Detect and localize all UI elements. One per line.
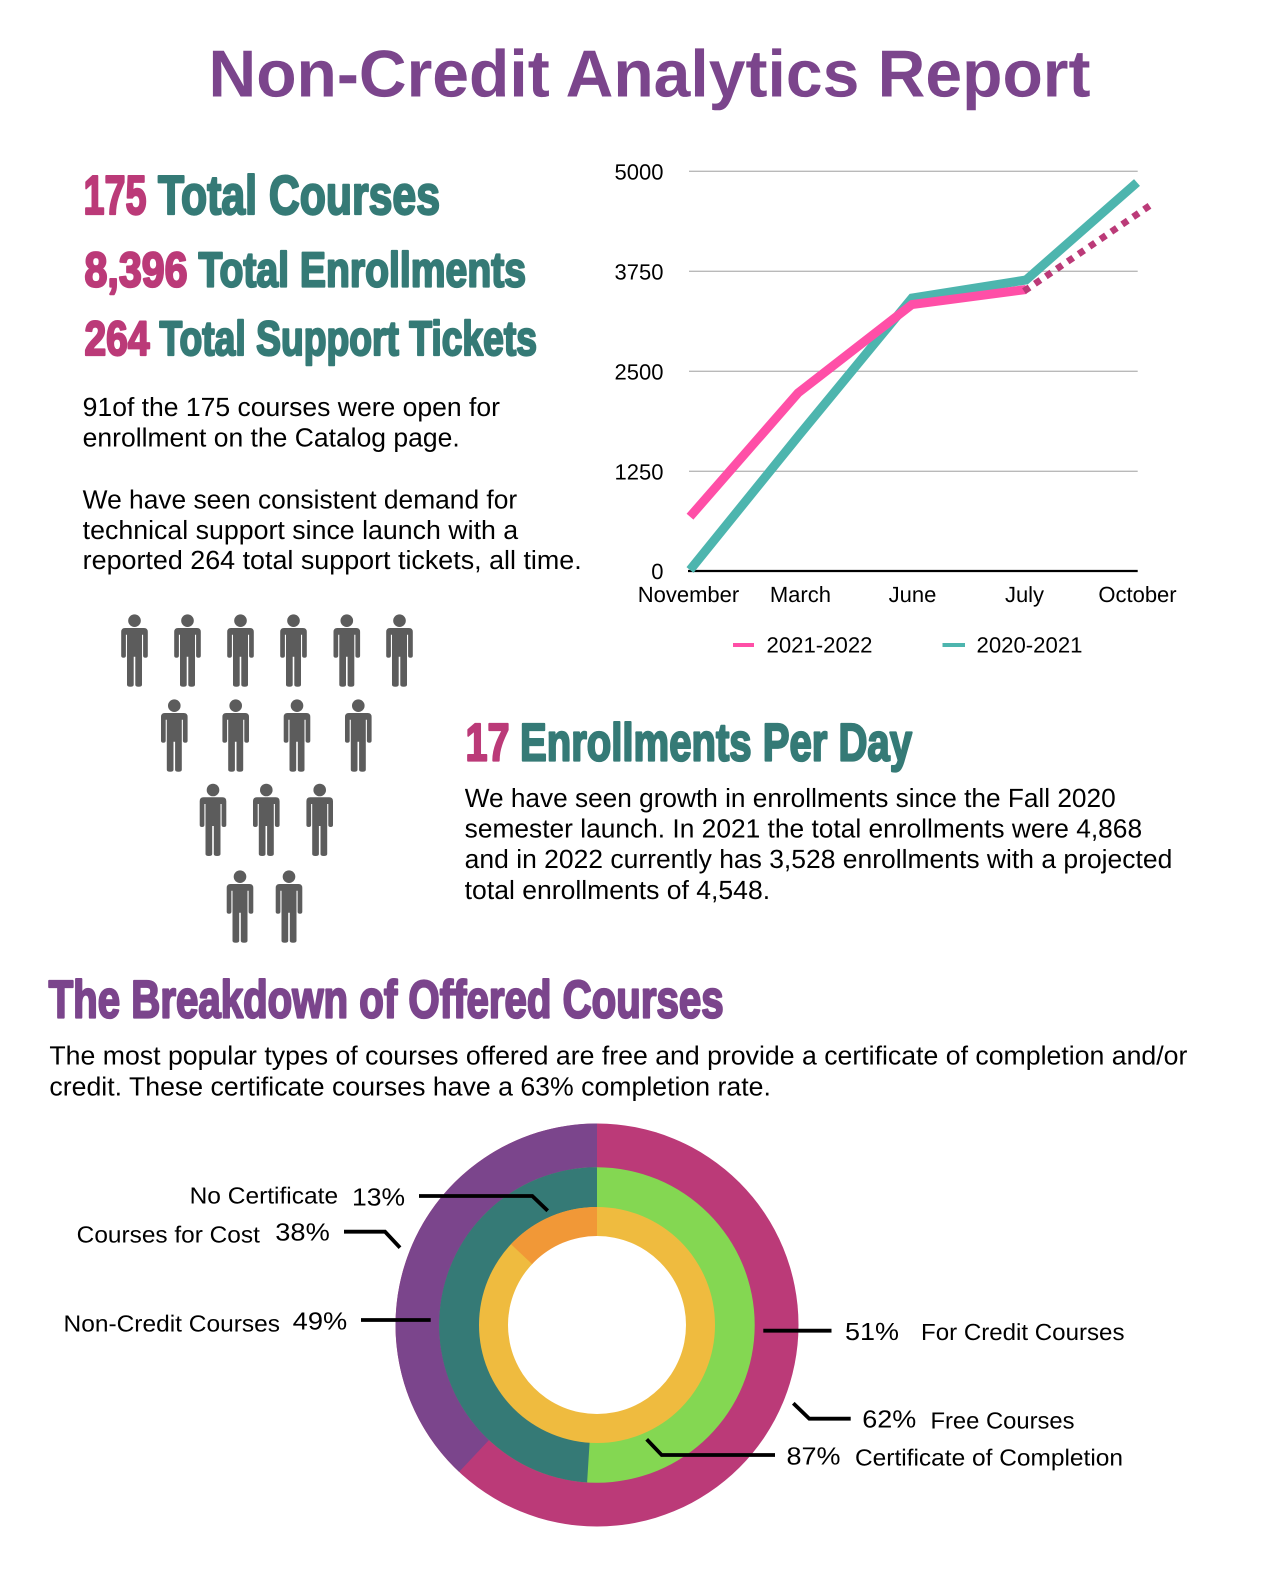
text block: catalog and support summary: reported 264 total support tickets, all time. bbox=[83, 545, 582, 575]
y axis labels bbox=[615, 159, 664, 584]
stat: total enrollments bbox=[84, 243, 526, 297]
stat: total support tickets: Total Support Tickets bbox=[160, 312, 537, 366]
y axis labels: 3750 bbox=[615, 259, 664, 284]
line chart: enrollments by month bbox=[615, 159, 1177, 658]
x axis labels: October bbox=[1098, 582, 1177, 607]
stat: total courses bbox=[84, 164, 440, 226]
text block: catalog and support summary: 91of the 175 courses were open for bbox=[83, 392, 500, 422]
text block: enrollment growth: semester launch. In 2021 the total enrollments were 4,868 bbox=[465, 814, 1142, 844]
y axis labels: 2500 bbox=[615, 359, 664, 384]
inner ring: certificate share bbox=[479, 1207, 715, 1443]
heading: enrollments per day: Enrollments Per Day bbox=[520, 714, 912, 772]
series: 2020-2021 bbox=[690, 182, 1137, 570]
middle ring: free vs non-credit share bbox=[439, 1167, 755, 1483]
stat: total support tickets: 264 bbox=[84, 312, 150, 366]
callout: courses for cost: Courses for Cost bbox=[77, 1222, 260, 1248]
legend bbox=[733, 632, 1082, 658]
y axis labels: 0 bbox=[651, 559, 664, 584]
stat: total courses: Total Courses bbox=[158, 164, 440, 226]
callout: certificate of completion bbox=[647, 1439, 1123, 1470]
x axis labels bbox=[638, 582, 1177, 607]
text block: enrollment growth bbox=[465, 783, 1172, 905]
callout: free courses bbox=[793, 1403, 1074, 1433]
callout: no certificate: No Certificate bbox=[190, 1182, 338, 1208]
callout: for credit courses: For Credit Courses bbox=[921, 1319, 1124, 1345]
x axis labels: July bbox=[1005, 582, 1044, 607]
callout: free courses: Free Courses bbox=[930, 1407, 1074, 1433]
donut chart: course breakdown bbox=[396, 1124, 798, 1526]
text block: catalog and support summary: We have seen consistent demand for bbox=[83, 484, 517, 514]
text block: breakdown description: credit. These certificate courses have a 63% completion rate. bbox=[49, 1072, 771, 1102]
legend: 2021-2022 bbox=[766, 632, 872, 658]
y axis labels: 1250 bbox=[615, 459, 664, 484]
text block: enrollment growth: total enrollments of 4,548. bbox=[465, 875, 770, 905]
text block: breakdown description: The most popular types of courses offered are free and provide a certificate of completion and/or bbox=[49, 1040, 1188, 1070]
callout: no certificate: 13% bbox=[352, 1184, 405, 1211]
x axis labels: June bbox=[889, 582, 936, 607]
text block: catalog and support summary: enrollment on the Catalog page. bbox=[83, 422, 460, 452]
heading: enrollments per day: 17 bbox=[466, 714, 510, 772]
callout: no certificate bbox=[190, 1182, 548, 1211]
text block: enrollment growth: We have seen growth in enrollments since the Fall 2020 bbox=[465, 783, 1116, 813]
callout: courses for cost: 38% bbox=[275, 1220, 330, 1247]
stat: total enrollments: 8,396 bbox=[84, 243, 188, 297]
callout: courses for cost bbox=[77, 1220, 400, 1248]
callout: certificate of completion: 87% bbox=[786, 1444, 840, 1470]
callout: for credit courses bbox=[763, 1319, 1124, 1346]
x axis labels: November bbox=[638, 582, 739, 607]
callout: non-credit courses: 49% bbox=[293, 1308, 347, 1335]
pictogram: people icons bbox=[121, 614, 413, 943]
heading: breakdown of offered courses: The Breakdown of Offered Courses bbox=[49, 970, 724, 1030]
x axis labels: March bbox=[770, 582, 831, 607]
stat: total enrollments: Total Enrollments bbox=[198, 243, 526, 297]
panel: headline statistics bbox=[84, 164, 537, 366]
callout: non-credit courses: Non-Credit Courses bbox=[64, 1311, 280, 1337]
stat: total courses: 175 bbox=[84, 164, 146, 226]
callout: certificate of completion: Certificate of Completion bbox=[855, 1444, 1123, 1470]
callout: non-credit courses bbox=[64, 1308, 431, 1337]
text block: catalog and support summary: technical support since launch with a bbox=[83, 515, 519, 545]
series: 2021-2022 bbox=[690, 290, 1026, 517]
stat: total support tickets bbox=[84, 312, 537, 366]
title: Non-Credit Analytics Report bbox=[208, 38, 1090, 112]
series: 2022 projection bbox=[1024, 206, 1150, 291]
text block: enrollment growth: and in 2022 currently has 3,528 enrollments with a projected bbox=[465, 844, 1172, 874]
legend: 2020-2021 bbox=[976, 632, 1082, 658]
heading: enrollments per day bbox=[466, 714, 912, 772]
y axis labels: 5000 bbox=[615, 159, 664, 184]
text block: catalog and support summary bbox=[83, 392, 582, 575]
callout: free courses: 62% bbox=[862, 1406, 916, 1433]
outer ring: for-cost share bbox=[396, 1124, 798, 1526]
text block: breakdown description bbox=[49, 1040, 1188, 1102]
callout: for credit courses: 51% bbox=[845, 1319, 899, 1346]
